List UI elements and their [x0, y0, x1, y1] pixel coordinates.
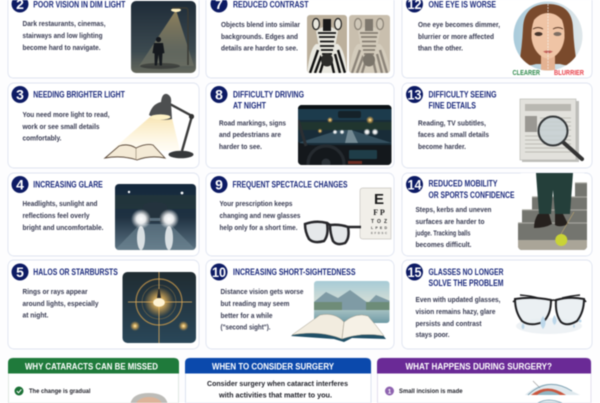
panel: 4 increasing glare	[8, 173, 199, 256]
heading: difficulty driving at night: DIFFICULTY DRIVING	[233, 89, 304, 100]
panel: 2 poor vision in dim light	[8, 0, 199, 78]
text: fine details description: become harder.	[418, 142, 466, 151]
number badge 9: 9	[215, 176, 223, 192]
icon: eye cross-section diagram	[525, 381, 580, 403]
heading: difficulty seeing fine details	[428, 89, 496, 111]
icon: faded zebra	[349, 15, 390, 73]
number badge 2	[11, 0, 28, 12]
panel: 15 glasses no longer solve the problem	[402, 260, 592, 349]
text: driving description	[219, 118, 286, 151]
label: blurrier: BLURRIER	[554, 68, 585, 77]
panel: 7 reduced contrast	[206, 0, 394, 78]
text: halos description	[22, 287, 98, 320]
heading: difficulty seeing fine details: DIFFICULTY SEEING	[428, 89, 496, 100]
text: the change is gradual: The change is gradual	[29, 388, 91, 395]
heading: what happens during surgery: WHAT HAPPENS DURING SURGERY?	[406, 360, 552, 372]
icon: eye chart: F P	[373, 208, 385, 217]
text: fine details description	[418, 119, 489, 151]
text: glasses description: vision remains hazy, glare	[416, 307, 496, 316]
header bar: when to consider surgery	[185, 358, 371, 374]
text: one eye description: than the other.	[418, 43, 463, 52]
text: fine details description: faces and small details	[418, 130, 489, 139]
panel: 9 frequent spectacle changes	[206, 173, 394, 256]
panel: 13 difficulty seeing fine details	[402, 83, 592, 168]
heading: needing brighter light: NEEDING BRIGHTER LIGHT	[33, 90, 125, 101]
text: mobility description: judge. Tracking balls	[415, 228, 470, 237]
number badge 3	[12, 86, 28, 103]
text: contrast description: backgrounds. Edges and	[221, 32, 298, 41]
text: halos description: at night.	[22, 311, 48, 320]
icon: night view from car dashboard	[297, 104, 392, 166]
text: mobility description: Steps, kerbs and uneven	[416, 205, 492, 214]
text: short-sightedness description	[220, 287, 304, 331]
text: driving description: and pedestrians are	[219, 130, 281, 139]
number badge 8: 8	[215, 86, 223, 102]
text: poor vision description: Dark restaurants, cinemas,	[22, 19, 106, 28]
icon: black glasses	[305, 222, 361, 244]
text: glare description: bright and uncomfortable.	[22, 223, 104, 232]
panel: what happens during surgery	[377, 358, 591, 403]
text: glasses description	[416, 295, 500, 339]
text: spectacle description	[220, 199, 300, 232]
icon: lamp with halo and rays	[122, 272, 196, 343]
text: brighter light description	[22, 110, 110, 143]
heading: reduced mobility or sports confidence	[428, 178, 515, 201]
number badge 10: 10	[212, 264, 226, 280]
number badge 15: 15	[408, 264, 422, 280]
text: one eye description: blurrier or more affected	[418, 32, 494, 41]
text: spectacle description: help only for a short time.	[220, 223, 298, 232]
text: mobility description: becomes difficult.	[416, 240, 472, 249]
icon: feet on steps with ball	[518, 173, 587, 250]
panel: 12 one eye is worse	[402, 0, 592, 78]
panel: 5 halos or starbursts	[8, 260, 199, 349]
text: driving description: harder to see.	[219, 142, 262, 151]
text: halos description: around lights, especially	[22, 299, 98, 308]
icon: sharp zebra	[307, 15, 347, 73]
text: glare description: reflections feel overly	[22, 211, 90, 220]
header bar: what happens during surgery	[377, 358, 591, 374]
heading: increasing glare: INCREASING GLARE	[33, 180, 103, 191]
text: poor vision description	[22, 19, 106, 52]
heading: difficulty driving at night: AT NIGHT	[233, 100, 266, 111]
text: glare description	[22, 199, 104, 232]
number badge 4: 4	[16, 176, 24, 192]
text: glare description: Headlights, sunlight and	[22, 199, 98, 208]
text: short-sightedness description: ("second sight").	[220, 322, 270, 331]
heading: difficulty driving at night	[233, 89, 304, 111]
icon: eye chart: T O Z	[371, 219, 387, 225]
text: mobility description: surfaces are harder to	[416, 217, 485, 226]
text: glasses description: persists and contrast	[416, 319, 482, 328]
text: glasses description: Even with updated glasses,	[416, 295, 500, 304]
text: small incision is made: Small incision is made	[399, 388, 463, 395]
icon: figure under street lamp	[131, 0, 196, 73]
icon: face split clear and blurry	[513, 1, 583, 71]
icon: check mark	[14, 386, 24, 396]
text: contrast description	[221, 20, 300, 52]
heading: increasing short-sightedness: INCREASING SHORT-SIGHTEDNESS	[233, 267, 356, 278]
text: contrast description: Objects blend into similar	[221, 20, 300, 29]
text: consider surgery description	[207, 379, 348, 400]
number badge 4	[12, 176, 28, 193]
text: brighter light description: comfortably.	[22, 134, 62, 143]
text: brighter light description: You need more light to read,	[22, 110, 110, 119]
text: poor vision description: stairways and low lighting	[22, 31, 102, 40]
number badge 8	[210, 86, 228, 103]
number badge 3: 3	[16, 86, 24, 102]
label: clearer: CLEARER	[512, 68, 541, 77]
heading: reduced mobility or sports confidence: REDUCED MOBILITY	[428, 178, 498, 189]
text: contrast description: details are harder to see.	[221, 43, 298, 52]
text: spectacle description: changing and new glasses	[220, 211, 300, 220]
text: short-sightedness description: Distance vision gets worse	[220, 287, 304, 296]
icon: eye chart: E F D S C	[371, 231, 387, 235]
heading: difficulty seeing fine details: FINE DETAILS	[428, 100, 476, 111]
icon: eye chart	[360, 188, 391, 239]
icon: older person's head	[130, 393, 168, 403]
panel: 3 needing brighter light	[8, 83, 199, 168]
text: halos description: Rings or rays appear	[22, 287, 88, 296]
text: poor vision description: become hard to navigate.	[22, 43, 101, 52]
icon: blurred mountain landscape	[314, 281, 390, 323]
text: mobility description	[415, 205, 492, 249]
text: one eye description	[418, 20, 500, 52]
heading: glasses no longer solve the problem: SOLVE THE PROBLEM	[428, 278, 504, 289]
icon: glasses with droplets	[513, 295, 586, 334]
heading: frequent spectacle changes: FREQUENT SPECTACLE CHANGES	[232, 180, 348, 191]
icon: eye chart: E	[374, 191, 384, 208]
number badge 13: 13	[408, 86, 422, 102]
heading: why cataracts can be missed: WHY CATARACTS CAN BE MISSED	[25, 360, 158, 372]
panel: when to consider surgery	[185, 358, 371, 403]
icon: newspaper under magnifying glass	[520, 99, 582, 162]
heading: reduced mobility or sports confidence: OR SPORTS CONFIDENCE	[428, 190, 515, 201]
panel: 10 increasing short-sightedness	[206, 260, 394, 349]
text: spectacle description: Your prescription keeps	[220, 199, 292, 208]
text: consider surgery description: with activities that matter to you.	[218, 391, 332, 400]
heading: when to consider surgery: WHEN TO CONSIDER SURGERY	[212, 360, 335, 372]
heading: glasses no longer solve the problem	[428, 267, 504, 289]
text: fine details description: Reading, TV subtitles,	[418, 119, 486, 128]
number badge 5	[12, 264, 28, 280]
panel: why cataracts can be missed	[8, 358, 179, 403]
text: short-sightedness description: better for a while	[220, 311, 272, 320]
panel: 14 reduced mobility or sports confidence	[402, 173, 592, 256]
icon: oncoming headlights on wet road	[115, 184, 196, 250]
heading: halos or starbursts: HALOS OR STARBURSTS	[33, 267, 118, 278]
panel: 8 difficulty driving at night	[205, 82, 395, 169]
icon: open book	[291, 314, 386, 342]
number badge 9	[210, 176, 228, 193]
text: brighter light description: work or see small details	[22, 122, 100, 131]
text: one eye description: One eye becomes dimmer,	[418, 20, 500, 29]
icon: eye chart: L P E D	[371, 226, 387, 230]
icon: step number 1: 1	[388, 389, 392, 395]
text: driving description: Road markings, signs	[219, 118, 286, 127]
text: short-sightedness description: but reading may seem	[220, 299, 290, 308]
number badge 7	[210, 0, 228, 13]
header bar: why cataracts can be missed	[8, 358, 179, 374]
text: consider surgery description: Consider surgery when cataract interferes	[207, 379, 348, 388]
icon: desk lamp and open book	[105, 94, 194, 160]
number badge 14: 14	[408, 176, 422, 192]
icon: step number 1	[385, 386, 394, 396]
text: glasses description: stays poor.	[416, 330, 450, 339]
number badge 5: 5	[16, 264, 24, 280]
heading: glasses no longer solve the problem: GLASSES NO LONGER	[428, 267, 504, 278]
